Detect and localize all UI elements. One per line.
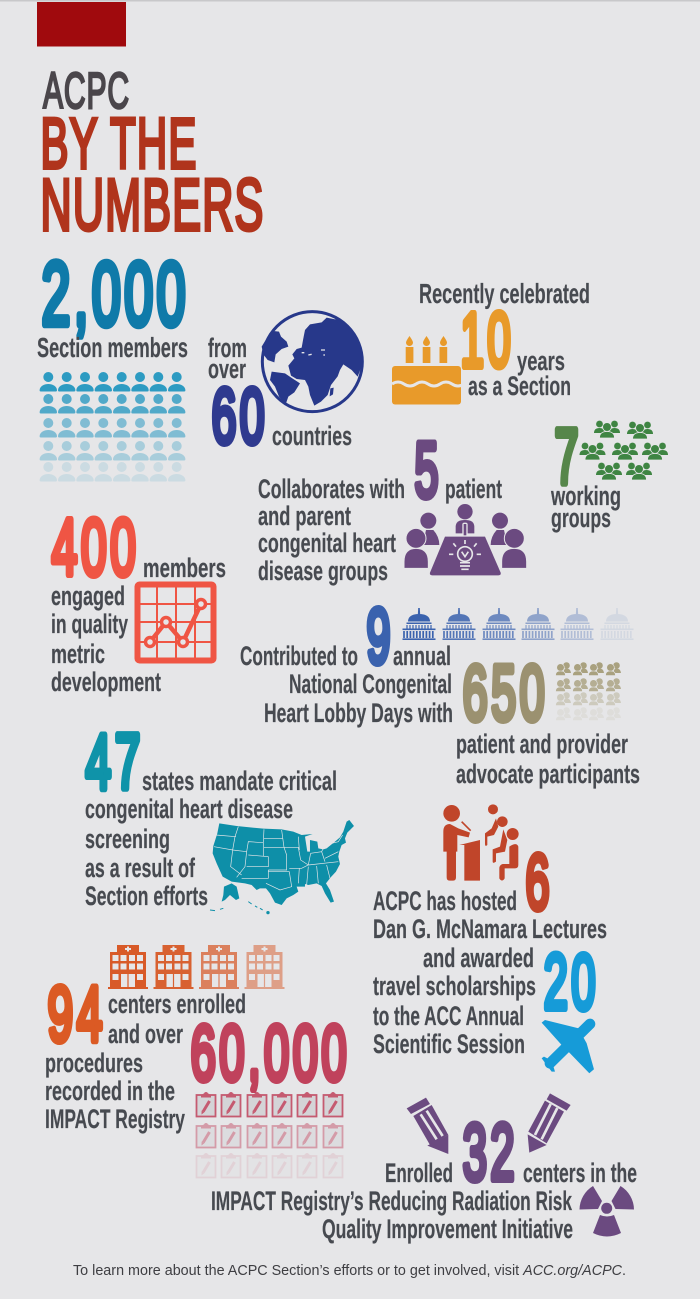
- panel: patient groups: [258, 426, 527, 586]
- text: states mandate: states mandate critical: [142, 766, 337, 796]
- title: [40, 62, 264, 246]
- panel: ten years: [392, 278, 590, 404]
- text: enrolled: [211, 1158, 637, 1244]
- number 5: 5: [414, 426, 438, 514]
- label: working groups: groups: [551, 503, 611, 533]
- label: from over: from: [208, 333, 247, 363]
- panel: radiation initiative: [211, 1093, 637, 1244]
- panel: working groups: [550, 412, 668, 533]
- text: contributed to: [240, 641, 453, 728]
- icon: line chart: [137, 584, 214, 660]
- text: enrolled: Enrolled: [385, 1158, 453, 1188]
- label: working groups: working: [550, 481, 621, 511]
- icon: radiation symbol: [580, 1186, 634, 1236]
- icon: participants: [556, 662, 621, 720]
- number 60,000: 60,000: [191, 1008, 350, 1096]
- number 32: 32: [463, 1108, 518, 1196]
- icon: groups: [580, 421, 668, 480]
- text: centers enrolled: centers enrolled: [108, 989, 246, 1019]
- panel: impact registry: [45, 945, 350, 1178]
- icon: capitol domes: [402, 608, 634, 640]
- panel: states: [85, 718, 354, 914]
- text: centers enrolled: procedures: [45, 1048, 143, 1078]
- icon: USA map: [210, 820, 354, 914]
- text: collaborates: [258, 474, 502, 586]
- label: years as a section: years: [517, 346, 565, 376]
- number 7: 7: [554, 412, 578, 500]
- text: collaborates: patient: [445, 474, 502, 504]
- text: lectures: and awarded: [423, 943, 534, 973]
- number 94: 94: [48, 970, 106, 1058]
- text: lectures: Scientific Session: [373, 1029, 525, 1059]
- title: ACPC: [43, 62, 130, 119]
- label: from over: [208, 333, 247, 384]
- label: recently celebrated: Recently celebrated: [419, 278, 590, 309]
- text: patient and provider: [456, 729, 640, 789]
- label: years as a section: as a Section: [468, 371, 571, 401]
- footer: To learn more about the ACPC Section’s efforts or to get involved, visit ACC.org/ACPC.: [73, 1263, 626, 1279]
- text: centers enrolled: recorded in the: [45, 1076, 175, 1106]
- number 6: 6: [526, 838, 550, 926]
- title: BY THE: [40, 104, 198, 184]
- number 20: 20: [544, 938, 599, 1026]
- label: from over: over: [208, 354, 246, 384]
- icon: birthday cake: [392, 336, 464, 404]
- text: collaborates: congenital heart: [258, 528, 396, 558]
- text: collaborates: Collaborates with: [258, 474, 405, 504]
- text: lectures: [373, 886, 607, 1059]
- text: members engaged: development: [51, 667, 161, 697]
- text: centers enrolled: IMPACT Registry: [45, 1104, 185, 1134]
- text: members engaged: metric: [51, 639, 105, 669]
- icon: airplane: [542, 1020, 594, 1073]
- text: collaborates: disease groups: [258, 556, 388, 586]
- number 400: 400: [52, 502, 139, 592]
- number 47: 47: [86, 718, 144, 806]
- text: enrolled: Quality Improvement Initiative: [322, 1214, 573, 1244]
- label: years as a section: [468, 346, 571, 401]
- text: lectures: travel scholarships: [373, 971, 536, 1001]
- number 2,000: 2,000: [42, 244, 189, 344]
- text: members engaged: engaged: [51, 581, 125, 611]
- text: states mandate: Section efforts: [85, 881, 208, 911]
- text: contributed to: Contributed to: [240, 641, 358, 671]
- text: members engaged: in quality: [51, 609, 128, 639]
- red header block: [37, 2, 126, 46]
- number 60: 60: [212, 372, 268, 460]
- text: lectures: to the ACC Annual: [373, 1001, 524, 1031]
- label: countries: countries: [272, 421, 352, 451]
- panel: quality metric: [51, 502, 226, 697]
- panel: countries: [208, 312, 362, 460]
- number 9: 9: [366, 592, 390, 680]
- text: states mandate: congenital heart disease: [85, 794, 293, 824]
- number 10: 10: [460, 298, 514, 384]
- panel: section members: [37, 244, 189, 482]
- text: members engaged: [51, 553, 226, 697]
- icon: pencils: [407, 1093, 571, 1154]
- icon: clipboards: [196, 1092, 342, 1178]
- text: contributed to: Heart Lobby Days with: [264, 698, 453, 728]
- text: centers enrolled: [45, 989, 246, 1134]
- panel: lobby days: [240, 592, 640, 789]
- number 650: 650: [463, 648, 548, 736]
- text: lectures: ACPC has hosted: [373, 886, 517, 916]
- text: contributed to: annual: [393, 641, 451, 671]
- icon: meeting around table: [404, 504, 527, 575]
- text: collaborates: and parent: [258, 501, 351, 531]
- title: NUMBERS: [40, 165, 264, 246]
- text: states mandate: [85, 766, 337, 911]
- text: enrolled: centers in the: [523, 1158, 637, 1188]
- icon: lecturer and audience: [443, 804, 519, 881]
- icon: hospitals: [108, 945, 284, 989]
- label: working groups: [550, 481, 621, 533]
- text: states mandate: as a result of: [85, 853, 196, 883]
- text: centers enrolled: and over: [108, 1019, 183, 1049]
- text: contributed to: National Congenital: [289, 669, 452, 699]
- icon: rows of people fading: [40, 372, 185, 482]
- text: members engaged: members: [143, 553, 226, 583]
- icon: globe: [262, 312, 362, 412]
- label: section members: Section members: [37, 332, 188, 363]
- panel: lectures: [373, 804, 607, 1073]
- text: states mandate: screening: [85, 824, 170, 854]
